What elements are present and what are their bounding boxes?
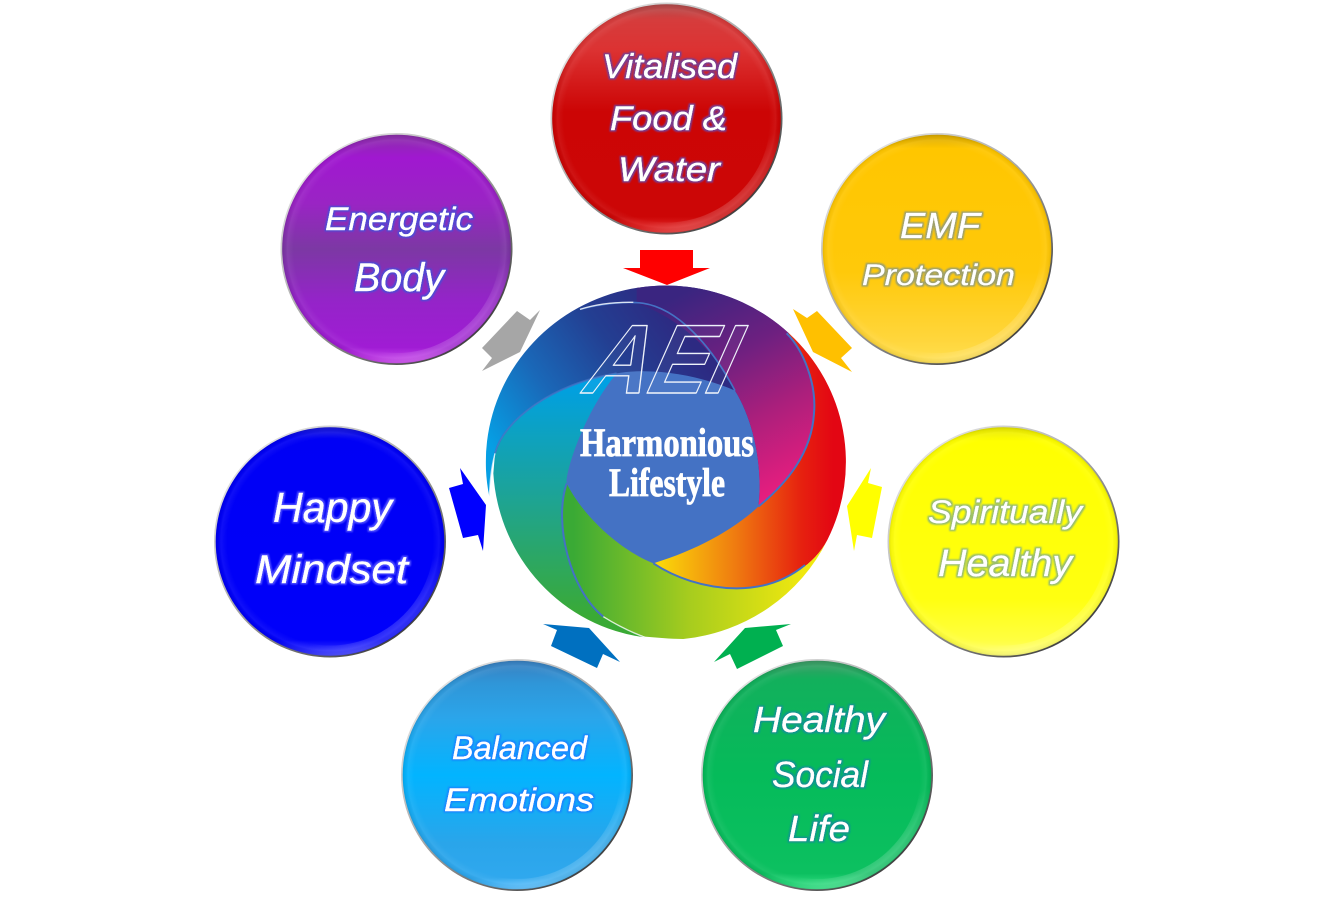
circle: Healthy Social Life [701,659,933,891]
circle: Energetic Body: Energetic [325,201,473,237]
logo blade: cyan to green [493,373,645,637]
circle: Balanced Emotions [401,659,633,891]
circle: Energetic Body: Body [354,256,447,300]
circle: EMF Protection: EMF [900,205,982,246]
circle: Spiritually Healthy: Spiritually [928,494,1084,530]
centre title: Harmonious Lifestyle: Lifestyle [609,460,725,505]
AEI outlined logo lettering: AEI [569,304,763,414]
circle: EMF Protection: Protection [862,259,1015,292]
circle: Balanced Emotions: Emotions [444,782,594,818]
circle: Healthy Social Life: Social [772,754,869,795]
circle: Spiritually Healthy: Healthy [938,543,1074,585]
circle: Vitalised Food & Water: Food & [610,100,727,138]
circle: Spiritually Healthy [888,426,1120,658]
central logo sphere [486,286,846,639]
logo centre disc [530,330,797,597]
centre title: Harmonious Lifestyle: Harmonious [580,420,754,465]
circle: Vitalised Food & Water [550,2,782,234]
arrow: green [714,624,791,669]
circle: Healthy Social Life: Healthy [753,699,887,740]
logo blade: yellow to red [653,333,846,588]
logo blade: green to yellow [562,483,827,639]
circle: Vitalised Food & Water: Water [618,151,722,189]
logo blade: blue to magenta [486,286,814,506]
arrow: grey [482,310,540,371]
circle: Happy Mindset: Mindset [255,548,410,592]
circle: EMF Protection [821,133,1053,365]
circle: Vitalised Food & Water: Vitalised [602,48,738,86]
arrow: orange [793,309,852,372]
centre title: Harmonious Lifestyle [580,420,754,505]
arrow: mid blue [543,624,620,668]
arrow: red [623,250,710,285]
circle: Happy Mindset: Happy [273,484,395,531]
circle: Healthy Social Life: Life [788,808,850,849]
circle: Balanced Emotions: Balanced [452,730,588,766]
arrow: yellow [847,468,882,551]
circle: Energetic Body [280,133,512,365]
circle: Happy Mindset [214,426,446,658]
arrow: blue [449,468,486,551]
logo blade outlines [489,302,814,637]
